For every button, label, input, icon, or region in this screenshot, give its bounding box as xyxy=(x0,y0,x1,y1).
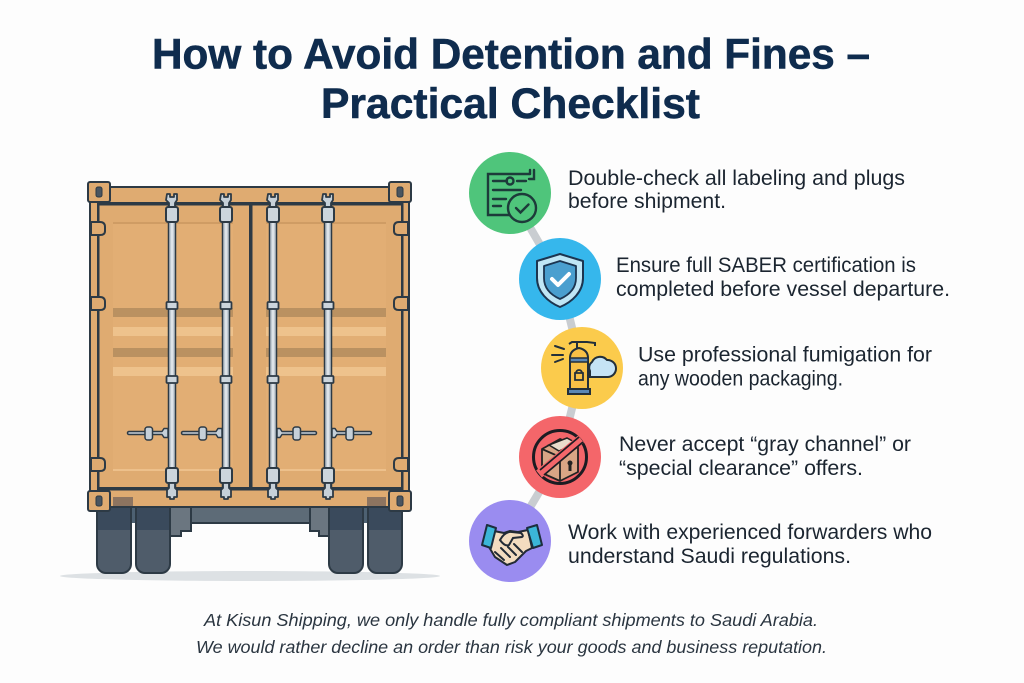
text xyxy=(568,167,905,213)
step 3: fumigation xyxy=(541,327,932,409)
rear wheels left xyxy=(97,507,170,573)
footer note: At Kisun Shipping, we only handle fully compliant shipments to Saudi Arabia. xyxy=(203,610,818,630)
text xyxy=(616,254,950,301)
text: Use professional fumigation for xyxy=(638,344,932,366)
text: understand Saudi regulations. xyxy=(568,545,851,568)
text: Work with experienced forwarders who xyxy=(568,521,932,544)
text: before shipment. xyxy=(568,190,726,213)
ground shadow xyxy=(60,571,440,581)
text xyxy=(619,433,911,480)
text xyxy=(568,521,932,568)
text: Never accept “gray channel” or xyxy=(619,433,911,456)
icon: handshake xyxy=(469,500,551,582)
text: Double-check all labeling and plugs xyxy=(568,167,905,190)
text: completed before vessel departure. xyxy=(616,278,950,301)
illustration: shipping container rear view xyxy=(60,182,440,581)
title: Practical Checklist xyxy=(321,80,700,128)
footer note: We would rather decline an order than risk your goods and business reputation. xyxy=(196,637,827,657)
connector line between steps xyxy=(510,193,582,541)
locking bars xyxy=(166,194,334,499)
text: “special clearance” offers. xyxy=(619,457,863,480)
text: any wooden packaging. xyxy=(638,368,843,390)
left door panel xyxy=(113,222,233,471)
title xyxy=(152,30,870,128)
step 5: experienced forwarders xyxy=(469,500,932,582)
icon: spray can and cloud xyxy=(541,327,623,409)
chassis xyxy=(131,505,368,536)
title: How to Avoid Detention and Fines – xyxy=(152,30,870,78)
door handles xyxy=(128,427,372,440)
rear wheels right xyxy=(329,507,402,573)
icon: document with check xyxy=(469,152,551,234)
bottom rail plates xyxy=(113,497,386,506)
step 2: SABER certification xyxy=(519,238,950,320)
text xyxy=(638,344,932,390)
container body xyxy=(90,187,409,507)
step 4: gray channel warning xyxy=(519,416,911,498)
side hinges xyxy=(91,222,408,471)
right door panel xyxy=(266,222,386,471)
icon: prohibited box xyxy=(519,416,601,498)
frame lines xyxy=(97,202,404,490)
corner castings xyxy=(88,182,411,511)
text: Ensure full SABER certification is xyxy=(616,254,916,277)
step 1: labeling check xyxy=(469,152,905,234)
footer note xyxy=(196,610,827,657)
icon: shield with check xyxy=(519,238,601,320)
